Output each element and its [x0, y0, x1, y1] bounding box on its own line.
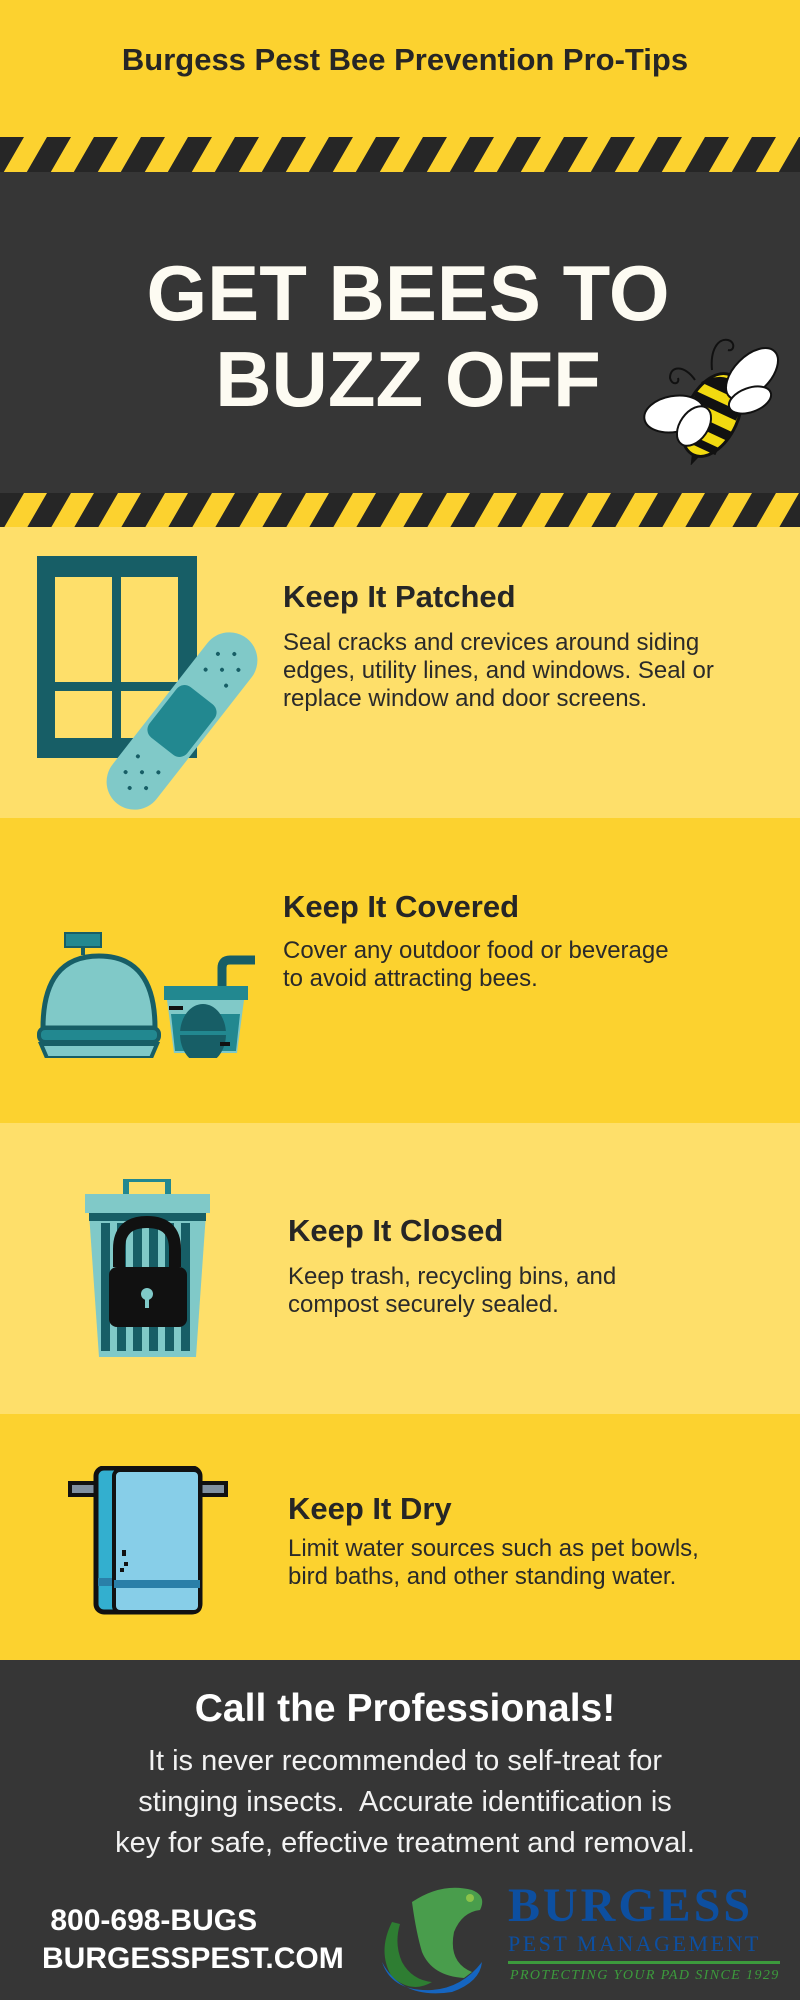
- text: Keep trash, recycling bins, and: [288, 1263, 616, 1290]
- footer text: It is never recommended to self-treat for: [148, 1745, 662, 1777]
- panel: keep it patched: [0, 527, 800, 818]
- title: GET BEES TO: [146, 249, 670, 337]
- title: BUZZ OFF: [215, 335, 601, 423]
- text: replace window and door screens.: [283, 685, 647, 712]
- text: [283, 937, 669, 992]
- footer text: [115, 1745, 695, 1859]
- logo: burgess pest management: PEST MANAGEMENT: [508, 1931, 761, 1956]
- contact info: BURGESSPEST.COM: [42, 1942, 344, 1975]
- panel: keep it closed: [0, 1123, 800, 1414]
- heading: Keep It Closed: [288, 1213, 503, 1248]
- logo: burgess pest management: PROTECTING YOUR PAD SINCE 1929: [510, 1968, 780, 1983]
- icon: towel: [68, 1466, 228, 1614]
- logo: burgess pest management: BURGESS: [508, 1879, 753, 1932]
- footer text: key for safe, effective treatment and removal.: [115, 1827, 695, 1859]
- footer panel: [0, 1660, 800, 2000]
- text: Seal cracks and crevices around siding: [283, 629, 699, 656]
- heading: Keep It Covered: [283, 889, 519, 924]
- heading: Keep It Patched: [283, 579, 516, 614]
- footer heading: Call the Professionals!: [195, 1687, 615, 1730]
- contact info: 800-698-BUGS: [50, 1904, 257, 1937]
- text: [288, 1263, 616, 1318]
- panel: keep it covered: [0, 818, 800, 1123]
- icon: locked trash can: [85, 1179, 210, 1357]
- icon: window with bandage: [37, 556, 258, 810]
- text: bird baths, and other standing water.: [288, 1563, 676, 1590]
- footer text: stinging insects. Accurate identification is: [138, 1786, 672, 1818]
- text: compost securely sealed.: [288, 1291, 559, 1318]
- icon: covered food and drink: [37, 932, 255, 1058]
- title panel: [0, 172, 800, 493]
- logo: burgess pest management: [382, 1879, 780, 1994]
- text: [288, 1535, 699, 1590]
- text: Cover any outdoor food or beverage: [283, 937, 669, 964]
- text: Limit water sources such as pet bowls,: [288, 1535, 699, 1562]
- title: [146, 249, 670, 423]
- icon: bee: [643, 338, 779, 465]
- text: edges, utility lines, and windows. Seal or: [283, 657, 714, 684]
- heading: Keep It Dry: [288, 1491, 452, 1526]
- text: [283, 629, 714, 712]
- contact info: [42, 1904, 344, 1975]
- panel: keep it dry: [0, 1414, 800, 1660]
- text: to avoid attracting bees.: [283, 965, 538, 992]
- header band: [0, 0, 800, 137]
- subtitle: Burgess Pest Bee Prevention Pro-Tips: [122, 42, 688, 77]
